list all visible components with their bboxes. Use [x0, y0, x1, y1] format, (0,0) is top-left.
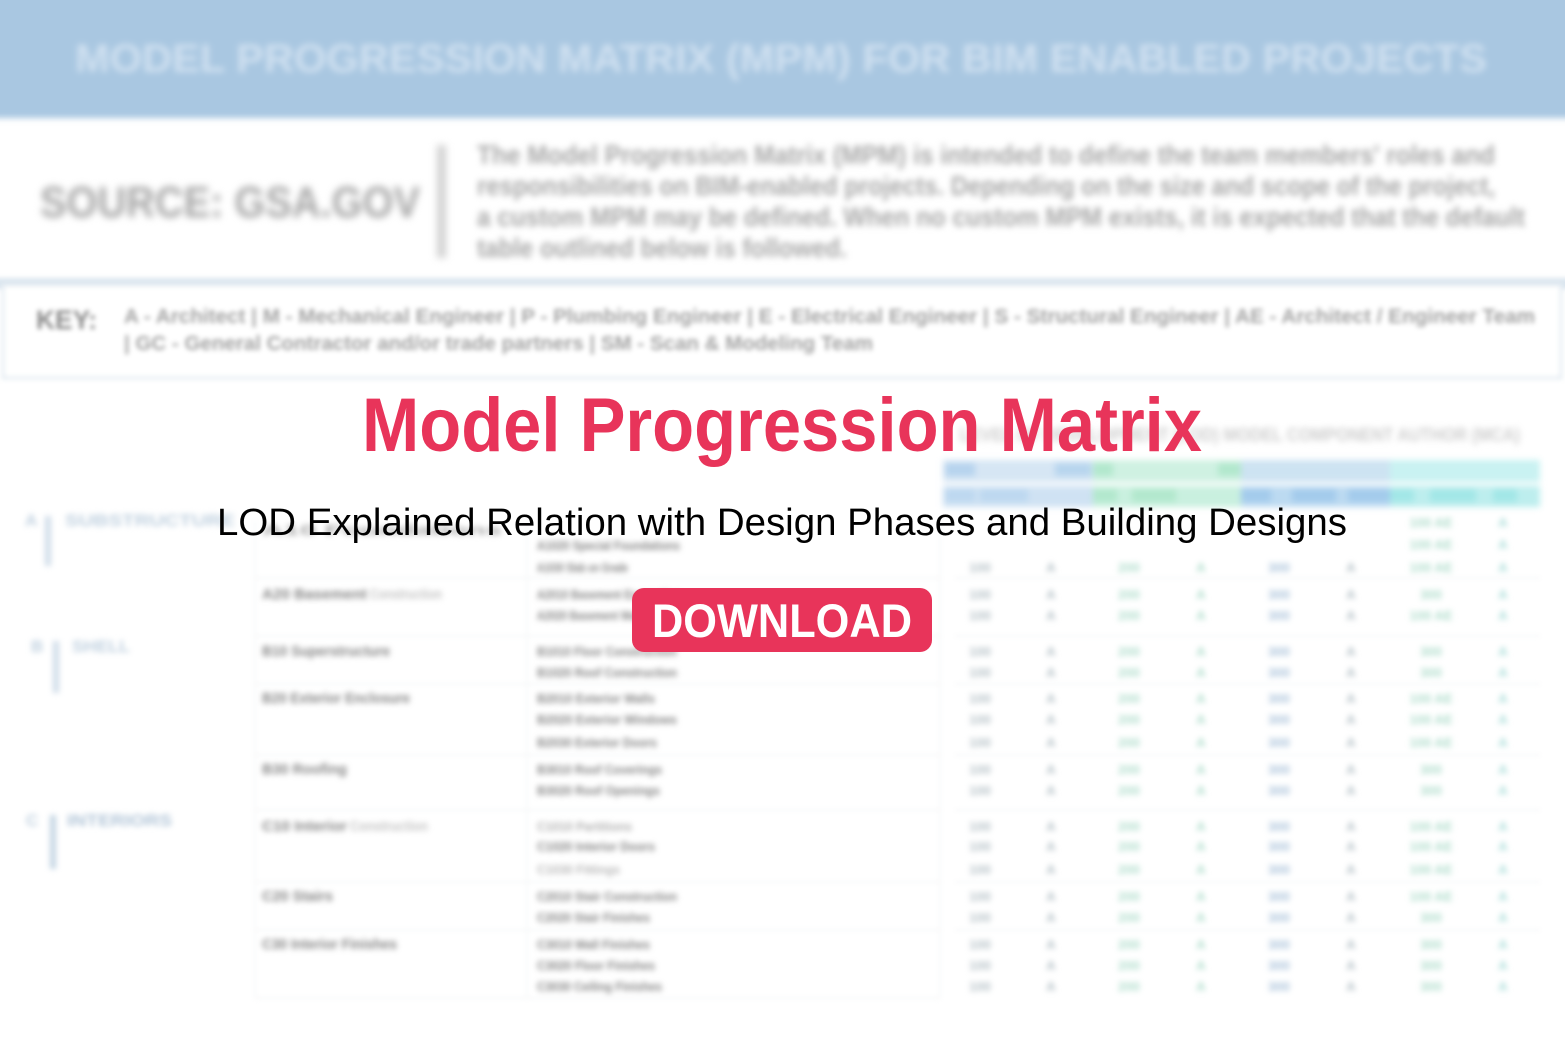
matrix cells: A [1196, 910, 1206, 925]
matrix cells: A [1196, 735, 1206, 750]
components column: C3010 Wall Finishes [537, 937, 650, 952]
matrix cells: A [1046, 862, 1056, 877]
matrix cells: 200 [1118, 937, 1140, 952]
matrix cells: A [1498, 587, 1508, 602]
matrix cells: A [1346, 839, 1356, 854]
matrix cells: 300 [1268, 910, 1290, 925]
section B: B [31, 637, 43, 656]
matrix cells: 200 [1118, 712, 1140, 727]
matrix cells: A [1196, 762, 1206, 777]
table grid lines [255, 520, 1540, 998]
matrix cells: 100 [969, 691, 991, 706]
matrix cells: A [1498, 910, 1508, 925]
matrix cells: 100 AE [1410, 839, 1453, 854]
matrix cells: 300 [1268, 889, 1290, 904]
matrix cells: A [1498, 839, 1508, 854]
components column: A2020 Basement Walls [537, 608, 647, 623]
matrix cells: 100 [969, 644, 991, 659]
matrix cells: A [1346, 862, 1356, 877]
matrix cells: 200 [1118, 608, 1140, 623]
overlay title: Model Progression Matrix [362, 383, 1202, 468]
matrix cells: A [1046, 889, 1056, 904]
matrix cells: A [1498, 937, 1508, 952]
matrix cells: 100 [969, 783, 991, 798]
matrix cells: A [1196, 560, 1206, 575]
matrix cells: A [1046, 910, 1056, 925]
matrix cells: A [1046, 735, 1056, 750]
components column: B2020 Exterior Windows [537, 712, 677, 727]
matrix cells: A [1046, 979, 1056, 994]
source label: SOURCE: GSA.GOV [40, 178, 421, 227]
matrix cells: A [1046, 587, 1056, 602]
matrix cells: 300 [1268, 691, 1290, 706]
matrix cells: 100 [969, 958, 991, 973]
matrix cells: A [1346, 560, 1356, 575]
matrix cells: A [1346, 979, 1356, 994]
intro paragraph: table outlined below is followed. [477, 233, 847, 263]
matrix cells: A [1196, 644, 1206, 659]
key text: | GC - General Contractor and/or trade partners | SM - Scan & Modeling Team [124, 333, 873, 355]
matrix cells: 300 [1268, 783, 1290, 798]
components column: B2010 Exterior Walls [537, 691, 655, 706]
matrix cells: 100 AE [1410, 515, 1453, 530]
matrix cells: A [1346, 762, 1356, 777]
element groups column: C30 Interior Finishes [262, 937, 397, 953]
element groups column: A20 Basement [262, 587, 367, 603]
matrix cells: A [1346, 910, 1356, 925]
matrix cells: A [1346, 819, 1356, 834]
matrix cells: 100 [969, 979, 991, 994]
matrix cells: 300 [1268, 937, 1290, 952]
matrix cells: A [1046, 937, 1056, 952]
key text [124, 306, 1535, 355]
element groups column: B20 Exterior Enclosure [262, 691, 410, 707]
header band [0, 0, 1565, 118]
components column: C3020 Floor Finishes [537, 958, 655, 973]
overlay subtitle: LOD Explained Relation with Design Phases and Building Designs [217, 502, 1347, 544]
matrix cells: 300 [1420, 937, 1442, 952]
components column: B2030 Exterior Doors [537, 735, 657, 750]
matrix cells: 300 [1268, 762, 1290, 777]
matrix cells: 300 [1268, 665, 1290, 680]
matrix cells: 200 [1118, 691, 1140, 706]
element groups column: Construction [350, 819, 428, 835]
section A: A [25, 511, 37, 530]
section C [26, 811, 172, 869]
components column: A1020 Special Foundations [537, 538, 680, 553]
matrix cells: A [1498, 783, 1508, 798]
matrix cells: 300 [1268, 644, 1290, 659]
matrix cells: 300 [1420, 783, 1442, 798]
matrix cells: 200 [1118, 644, 1140, 659]
matrix cells: 200 [1118, 762, 1140, 777]
element groups column: Construction [370, 587, 442, 603]
section A [25, 511, 235, 566]
matrix cells: 100 AE [1410, 608, 1453, 623]
matrix cells: A [1046, 608, 1056, 623]
matrix cells: 300 [1268, 839, 1290, 854]
matrix cells: 100 [969, 762, 991, 777]
key label: KEY: [36, 305, 97, 335]
components column: B1020 Roof Construction [537, 665, 677, 680]
matrix cells: A [1498, 691, 1508, 706]
matrix cells: A [1498, 862, 1508, 877]
components column: C3030 Ceiling Finishes [537, 979, 662, 994]
section labels [25, 511, 235, 869]
matrix cells: 300 [1420, 762, 1442, 777]
matrix cells: A [1346, 712, 1356, 727]
matrix heading: LEVEL OF DEVELOPMENT (LOD) MODEL COMPONENT AUTHOR (MCA) [960, 425, 1520, 445]
matrix cells: A [1498, 560, 1508, 575]
section C: C [26, 811, 38, 830]
components column: B3020 Roof Openings [537, 783, 660, 798]
matrix cells: A [1196, 665, 1206, 680]
matrix cells: A [1196, 839, 1206, 854]
matrix cells: A [1196, 958, 1206, 973]
matrix cells: A [1346, 587, 1356, 602]
intro paragraph [477, 140, 1525, 263]
matrix cells: A [1046, 665, 1056, 680]
key panel [0, 278, 1565, 378]
matrix cells: A [1046, 712, 1056, 727]
element groups column: B10 Superstructure [262, 644, 390, 660]
matrix cells: 200 [1118, 560, 1140, 575]
matrix cells: A [1498, 889, 1508, 904]
matrix cells: A [1498, 958, 1508, 973]
components column: C2010 Stair Construction [537, 889, 677, 904]
matrix cells: 300 [1268, 958, 1290, 973]
components column: B1010 Floor Construction [537, 644, 677, 659]
element groups column: C20 Stairs [262, 889, 333, 905]
matrix cells: 100 [969, 712, 991, 727]
components column: A1030 Slab on Grade [537, 560, 628, 575]
matrix cells: A [1346, 735, 1356, 750]
matrix cells: 100 [969, 862, 991, 877]
matrix cells: 100 [969, 937, 991, 952]
matrix cells: A [1346, 644, 1356, 659]
matrix cells: A [1498, 712, 1508, 727]
section C: INTERIORS [67, 811, 172, 830]
matrix cells: 300 [1268, 862, 1290, 877]
matrix cells: 100 AE [1410, 560, 1453, 575]
matrix cells: A [1196, 691, 1206, 706]
matrix cells: 100 AE [1410, 889, 1453, 904]
matrix cells: A [1196, 862, 1206, 877]
matrix cells: 300 [1420, 958, 1442, 973]
element groups column: C10 Interior [262, 819, 347, 835]
matrix cells: 100 [969, 910, 991, 925]
matrix cells: A [1046, 783, 1056, 798]
matrix cells: 200 [1118, 735, 1140, 750]
matrix cells: 300 [1268, 979, 1290, 994]
element groups column: B30 Roofing [262, 762, 347, 778]
matrix cells: 300 [1268, 819, 1290, 834]
matrix cells: A [1196, 587, 1206, 602]
matrix cells: A [1346, 937, 1356, 952]
matrix cells: A [1196, 712, 1206, 727]
matrix cells: 100 [969, 735, 991, 750]
matrix cells: A [1498, 735, 1508, 750]
matrix cells: A [1196, 979, 1206, 994]
matrix cells: 300 [1268, 712, 1290, 727]
matrix cells: A [1498, 819, 1508, 834]
header title: MODEL PROGRESSION MATRIX (MPM) FOR BIM ENABLED PROJECTS [75, 37, 1487, 81]
matrix cells: 100 [969, 608, 991, 623]
matrix cells: 100 [969, 665, 991, 680]
matrix cells: 300 [1420, 587, 1442, 602]
matrix cells: 100 AE [1410, 537, 1453, 552]
matrix cells: A [1346, 783, 1356, 798]
matrix cells: A [1046, 819, 1056, 834]
matrix cells: 300 [1268, 560, 1290, 575]
matrix cells: 300 [1268, 735, 1290, 750]
matrix cells: 200 [1118, 889, 1140, 904]
matrix cells: 200 [1118, 587, 1140, 602]
matrix cells: A [1196, 937, 1206, 952]
matrix cells: 100 AE [1410, 819, 1453, 834]
matrix cells: 200 [1118, 819, 1140, 834]
matrix cells: A [1046, 762, 1056, 777]
matrix cells: A [1046, 958, 1056, 973]
matrix cells: A [1346, 665, 1356, 680]
matrix cells: 200 [1118, 665, 1140, 680]
matrix cells: A [1498, 515, 1508, 530]
matrix cells: 300 [1420, 910, 1442, 925]
matrix cells: A [1498, 979, 1508, 994]
components column: A2010 Basement Excavation [537, 587, 680, 602]
matrix cells: 300 [1420, 665, 1442, 680]
section A: SUBSTRUCTURE [65, 511, 235, 530]
matrix cells: 200 [1118, 958, 1140, 973]
matrix cells: 300 [1420, 644, 1442, 659]
matrix cells: A [1346, 691, 1356, 706]
matrix cells: 100 AE [1410, 735, 1453, 750]
matrix cells: A [1196, 889, 1206, 904]
matrix cells: 200 [1118, 979, 1140, 994]
matrix cells: 100 AE [1410, 862, 1453, 877]
matrix cells: A [1196, 819, 1206, 834]
matrix cells: A [1046, 691, 1056, 706]
matrix cells: 100 [969, 560, 991, 575]
matrix cells: A [1046, 644, 1056, 659]
matrix cells: 100 [969, 889, 991, 904]
source divider [437, 145, 446, 258]
element groups column: A10 Foundations [262, 523, 502, 539]
matrix cells: A [1046, 560, 1056, 575]
matrix cells: A [1498, 762, 1508, 777]
matrix cells: A [1498, 608, 1508, 623]
matrix cells: 100 [969, 587, 991, 602]
matrix cells: A [1498, 665, 1508, 680]
components column [537, 538, 680, 994]
matrix cells: 100 [969, 839, 991, 854]
matrix cells: A [1046, 839, 1056, 854]
element groups column [262, 523, 502, 953]
matrix cells: 300 [1420, 979, 1442, 994]
source block [40, 145, 446, 258]
components column: C1010 Partitions [537, 819, 632, 834]
matrix cells: 100 AE [1410, 712, 1453, 727]
section B: SHELL [72, 637, 130, 656]
components column: B3010 Roof Coverings [537, 762, 662, 777]
matrix cells: 200 [1118, 862, 1140, 877]
matrix cells: A [1196, 608, 1206, 623]
matrix header bands [943, 460, 1540, 507]
matrix cells: 200 [1118, 910, 1140, 925]
matrix cells: 300 [1268, 587, 1290, 602]
matrix cells: 200 [1118, 839, 1140, 854]
matrix cells: A [1346, 958, 1356, 973]
matrix cells: 200 [1118, 783, 1140, 798]
matrix cells: 100 AE [1410, 691, 1453, 706]
components column: C2020 Stair Finishes [537, 910, 650, 925]
download button: DOWNLOAD [652, 594, 912, 647]
key text: A - Architect | M - Mechanical Engineer | P - Plumbing Engineer | E - Electrical Engineer | S - Structural Engineer | AE - Architect / Engineer Team [124, 306, 1535, 328]
matrix cells: A [1346, 889, 1356, 904]
matrix cells [969, 515, 1508, 994]
matrix cells: A [1498, 644, 1508, 659]
components column: C1020 Interior Doors [537, 839, 655, 854]
matrix cells: 100 [969, 819, 991, 834]
matrix cells: 300 [1268, 608, 1290, 623]
section B [31, 637, 130, 693]
matrix cells: A [1196, 783, 1206, 798]
matrix cells: A [1498, 537, 1508, 552]
components column: C1030 Fittings [537, 862, 620, 877]
matrix cells: A [1346, 608, 1356, 623]
